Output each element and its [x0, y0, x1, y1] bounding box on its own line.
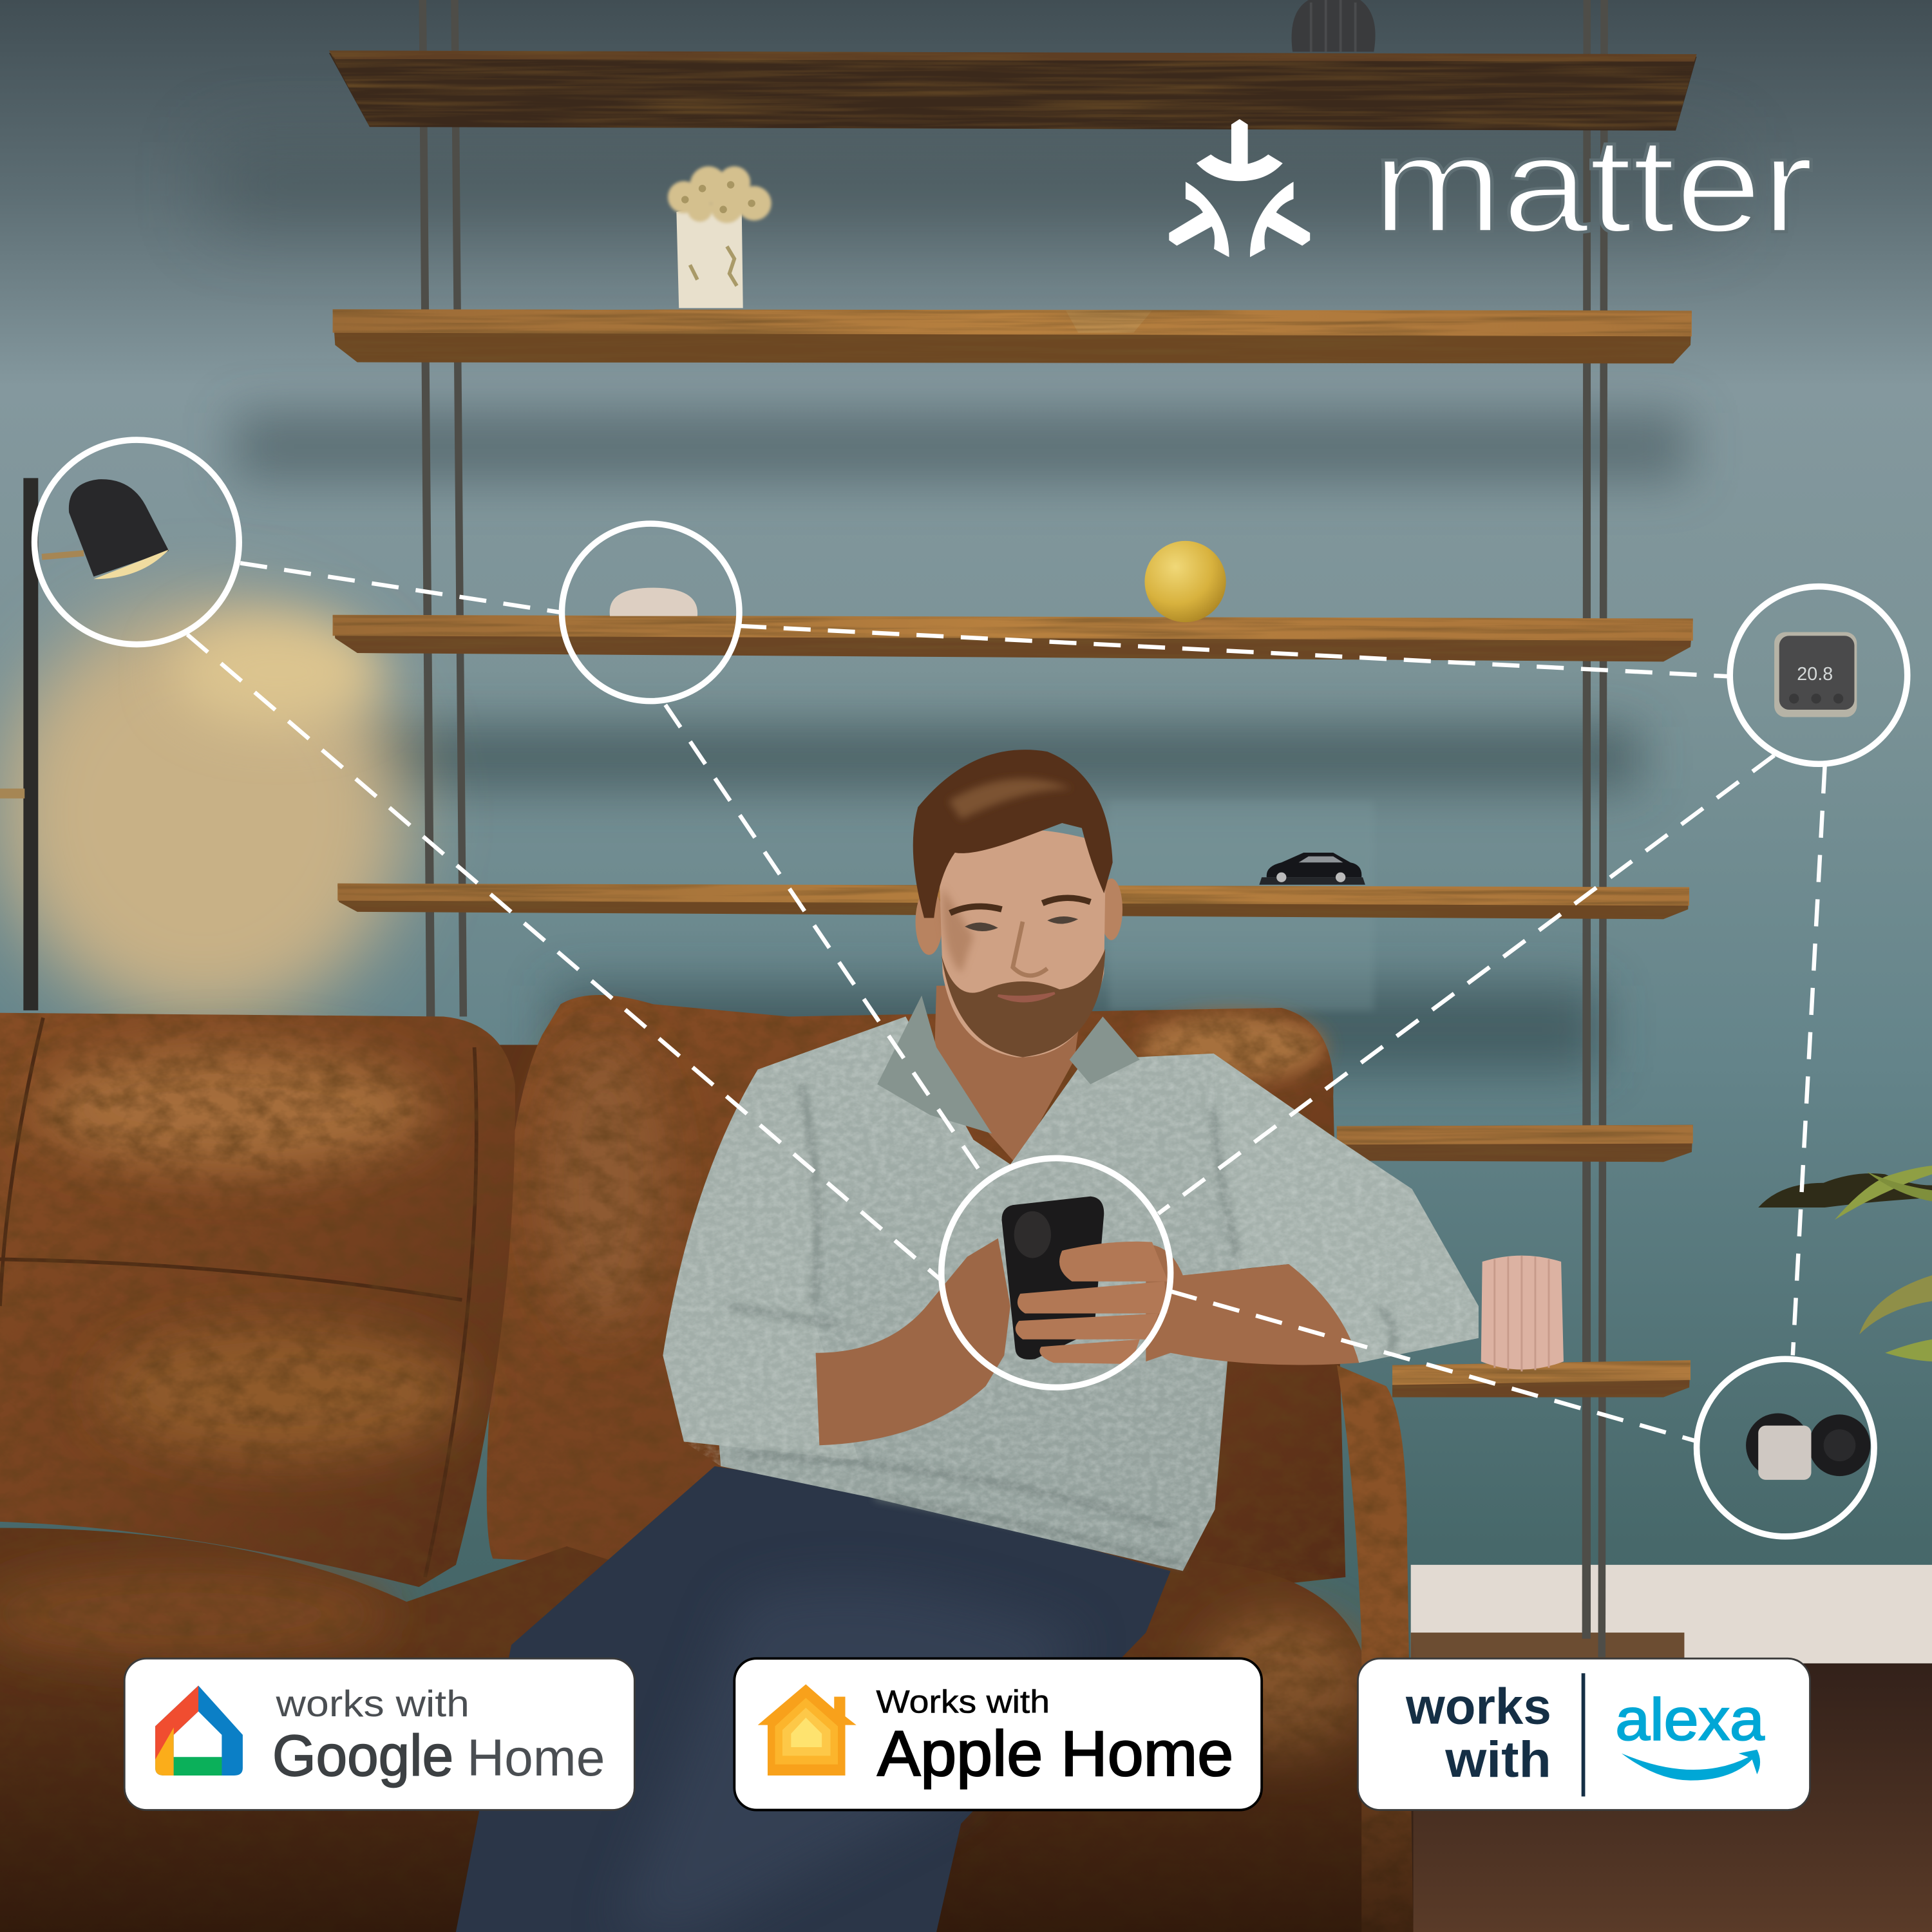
- mouth: [998, 993, 1055, 1001]
- decor: yellow ball: [1144, 541, 1226, 622]
- linen texture: [653, 1010, 1491, 1589]
- works with label: works: [1405, 1678, 1551, 1735]
- beard: [942, 949, 1105, 1057]
- phone: [1001, 1197, 1104, 1359]
- shelf 5: [1337, 1125, 1693, 1162]
- plant leaves: [1758, 1166, 1932, 1361]
- neck: [934, 986, 1084, 1164]
- sofa back right cushion: [487, 995, 1345, 1589]
- sofa seat highlight: [0, 1565, 394, 1663]
- badge: Alexa: [1358, 1658, 1810, 1810]
- plug device: [1746, 1414, 1870, 1480]
- sofa seat: [0, 1528, 1368, 1932]
- Google Home icon: [155, 1685, 243, 1776]
- alexa label: alexa: [1615, 1687, 1765, 1753]
- Works with label: Works with: [876, 1683, 1050, 1719]
- eyes: [965, 916, 1078, 931]
- collar: [877, 996, 1140, 1133]
- device circles: [35, 440, 1908, 1537]
- sofa bottom shadow: [0, 1639, 1414, 1932]
- floor lamp stand: [0, 478, 38, 1010]
- shelf 2: [333, 309, 1692, 363]
- ears: [916, 878, 1122, 955]
- face: [939, 829, 1105, 1057]
- decor: pink vase: [1481, 1256, 1564, 1371]
- matter wordmark: matter: [1372, 109, 1814, 261]
- badge: Google Home: [124, 1658, 634, 1810]
- shelf 6: [1392, 1360, 1690, 1397]
- shirt left sleeve: [663, 1070, 859, 1460]
- matter icon: [1169, 119, 1310, 257]
- badge: Apple Home: [734, 1658, 1262, 1810]
- matter logo: [1169, 109, 1814, 261]
- cushion seams: [0, 1018, 477, 1577]
- leather texture: [0, 986, 1417, 1932]
- alexa smile: [1622, 1750, 1760, 1781]
- works with label: [1405, 1678, 1551, 1788]
- sofa middle highlight: [542, 1035, 665, 1331]
- lamp head: [42, 479, 169, 579]
- decor: model car: [1259, 853, 1365, 885]
- head: [913, 750, 1113, 1057]
- sofa: [0, 986, 1417, 1932]
- fingers: [1016, 1242, 1168, 1364]
- man: [456, 750, 1491, 1932]
- connection lines: [187, 563, 1825, 1442]
- eyebrows: [950, 898, 1090, 913]
- sofa arm: [1337, 1365, 1414, 1932]
- sofa left cushion: [0, 1013, 515, 1587]
- divider: [1582, 1673, 1585, 1797]
- left cushion highlights: [37, 1047, 468, 1460]
- left forearm: [816, 1238, 1010, 1445]
- wood grain: [320, 37, 1712, 1417]
- Apple Home label: Apple Home: [877, 1718, 1233, 1790]
- Home label: Home: [467, 1729, 605, 1787]
- shirt: [653, 996, 1491, 1589]
- speaker device: [610, 588, 697, 616]
- thermostat device: 20.8: [1797, 664, 1833, 685]
- decor: flower vase: [668, 166, 772, 308]
- works with label: works with: [275, 1683, 469, 1725]
- Apple Home icon: [758, 1684, 857, 1776]
- face shadow: [942, 887, 973, 973]
- nose: [1013, 922, 1047, 976]
- sofa frame behind cushions: [493, 1045, 567, 1414]
- jeans: [456, 1466, 1171, 1932]
- shirt torso: [703, 1016, 1247, 1571]
- shelf 1: [329, 50, 1697, 131]
- baseboard and floor: [1356, 1565, 1932, 1932]
- phone camera: [1014, 1211, 1051, 1258]
- hair highlight: [949, 779, 1072, 819]
- shelf rods: [419, 0, 1608, 1657]
- decor: top vase: [1292, 0, 1376, 52]
- shelf 4: [337, 884, 1689, 919]
- Google label: Google: [272, 1724, 453, 1788]
- shelf 3: [333, 615, 1693, 661]
- sofa seat right highlight: [1195, 1614, 1368, 1762]
- right forearm: [1146, 1244, 1359, 1365]
- thermostat device: [1774, 632, 1857, 717]
- shirt wrinkles: [727, 1084, 1394, 1565]
- sofa right highlight: [1140, 1013, 1325, 1082]
- shelves: [320, 37, 1712, 1417]
- shirt right sleeve: [1214, 1054, 1479, 1363]
- works with label: with: [1444, 1731, 1551, 1788]
- hair: [913, 750, 1113, 918]
